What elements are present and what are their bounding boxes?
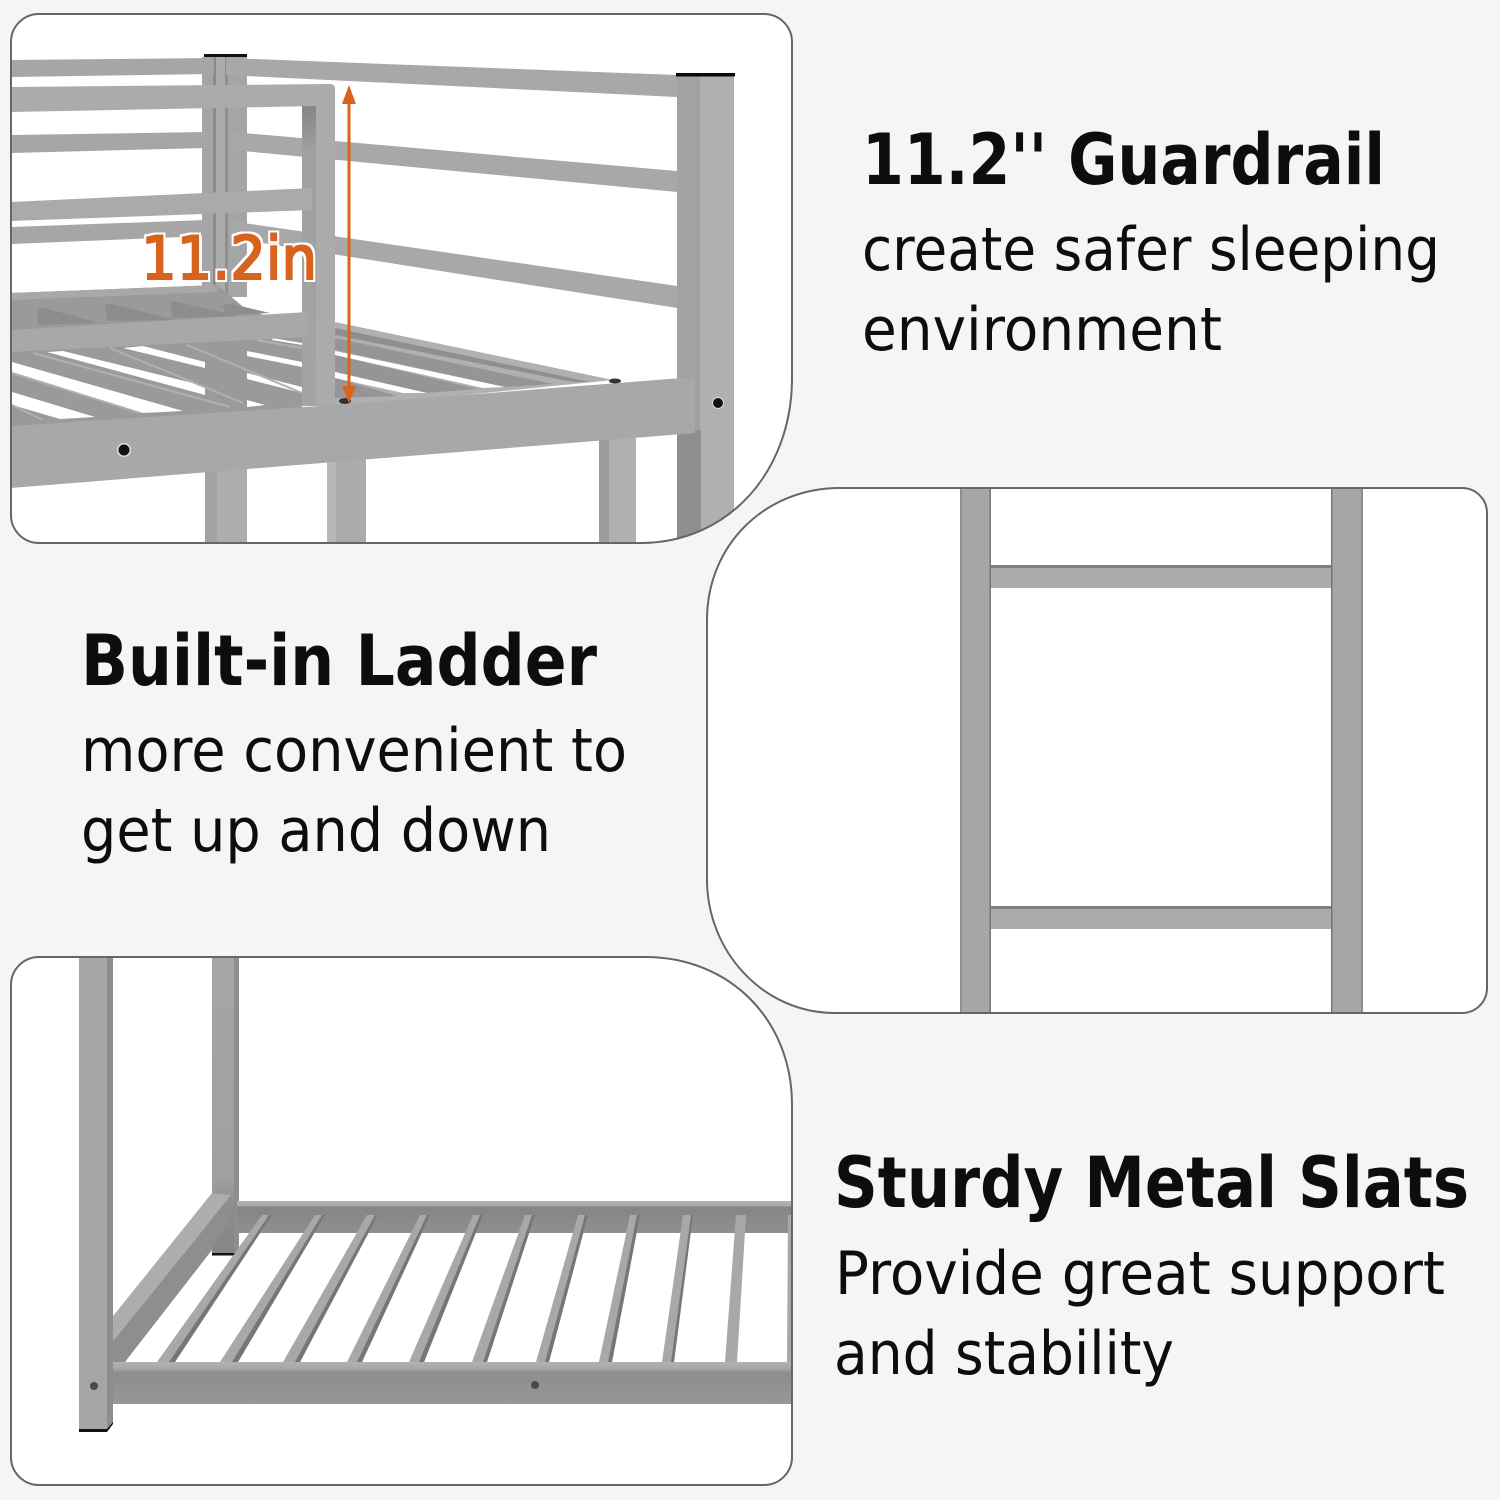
- back rail: [237, 1201, 793, 1233]
- text block: guardrail: create safer sleeping: [862, 215, 1440, 285]
- text block: ladder: Built-in Ladder: [81, 620, 597, 702]
- guard rail panel: [11, 84, 335, 406]
- text block: guardrail: 11.2'' Guardrail: [862, 119, 1385, 201]
- dimension arrow: [342, 85, 356, 403]
- text block: ladder: more convenient to: [81, 716, 627, 786]
- rear post: [212, 955, 239, 1256]
- legs: [205, 430, 701, 546]
- ladder rungs: [991, 565, 1331, 929]
- rear bed frame and slats, left of guard post: [11, 285, 302, 430]
- back corner post: [202, 54, 247, 297]
- text block: guardrail: [862, 119, 1440, 365]
- ladder side rails: [960, 487, 1363, 1015]
- text block: ladder: get up and down: [81, 796, 551, 866]
- slat shaded edges: [169, 1215, 693, 1362]
- front frame rail: [11, 377, 695, 488]
- text block: slats: and stability: [834, 1319, 1174, 1389]
- text block: ladder: [81, 620, 627, 866]
- back rails left: [11, 58, 214, 244]
- side rail: [113, 1193, 231, 1362]
- text block: slats: Provide great support: [835, 1239, 1445, 1309]
- panel: guardrail photo: [11, 14, 792, 546]
- bed side rail and slats, right of guard post: [335, 322, 613, 408]
- slats: [157, 1215, 793, 1362]
- dimension label: 11.2in: [141, 224, 317, 294]
- panel: ladder photo: [707, 487, 1487, 1015]
- right corner post: [676, 73, 735, 546]
- front rail: [108, 1362, 794, 1404]
- front post: [79, 955, 113, 1432]
- bolts: [90, 1381, 539, 1390]
- back rails right: [226, 58, 677, 308]
- bolts: [117, 378, 724, 457]
- text block: slats: [834, 1142, 1469, 1389]
- panel: metal slats photo: [11, 955, 794, 1485]
- text block: guardrail: environment: [862, 295, 1222, 365]
